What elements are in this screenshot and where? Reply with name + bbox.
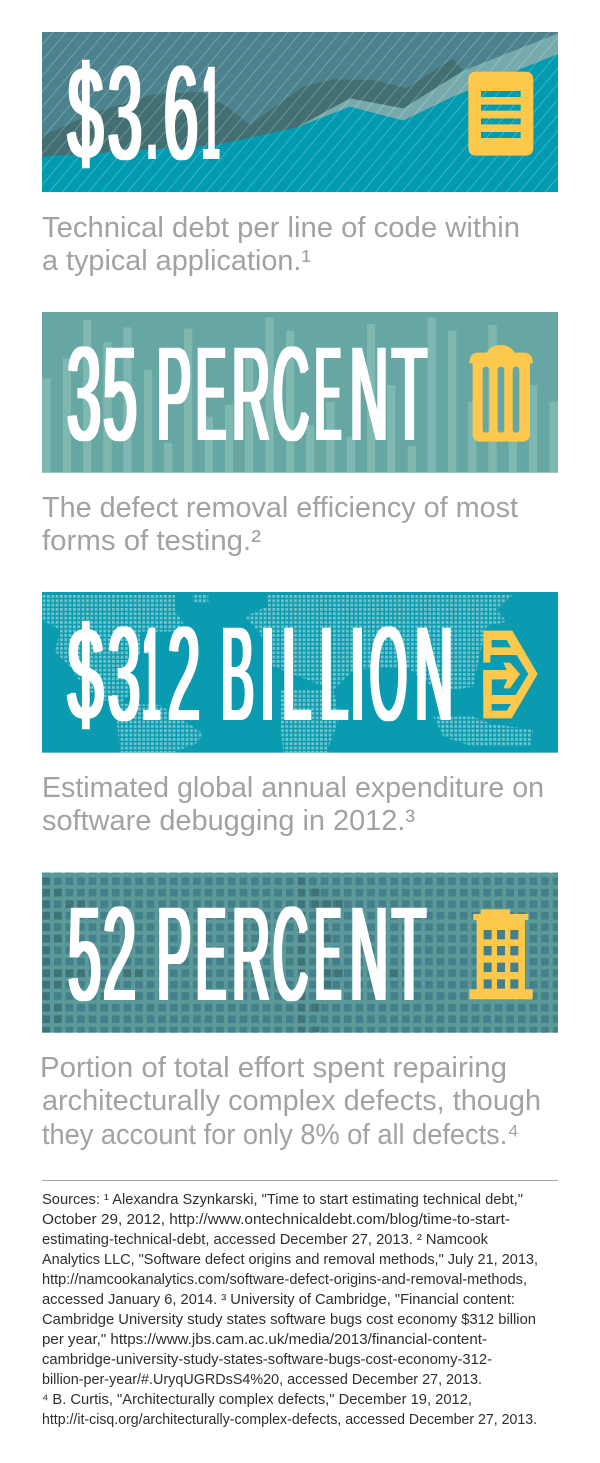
dotted world map background (42, 592, 558, 753)
sources text block: Sources: ¹ Alexandra Szynkarski, "Time to start estimating technical debt," (42, 1192, 523, 1208)
heading: 35 PERCENT: E (315, 320, 341, 469)
sources text block: billion-per-year/#.UryqUGRDsS4%20, accessed December 27, 2013. (42, 1372, 482, 1388)
sources text block (42, 1192, 538, 1428)
panel: $3.61 technical debt (42, 32, 558, 192)
heading: 35 PERCENT: R (232, 320, 270, 469)
panel: $312 billion: N (415, 600, 453, 749)
heading: $312 BILLION: I (350, 600, 365, 749)
sources text block: http://namcookanalytics.com/software-defect-origins-and-removal-methods, (42, 1272, 527, 1288)
panel: $3.61 technical debt: 1 (203, 39, 219, 188)
sources text block: Cambridge University study states software bugs cost economy $312 billion (42, 1312, 536, 1328)
sources text block: estimating-technical-debt, accessed December 27, 2013. ² Namcook (42, 1232, 489, 1248)
heading: 35 PERCENT: N (350, 320, 388, 469)
heading: 52 PERCENT: 5 (68, 880, 101, 1029)
heading: $3.61: . (147, 39, 157, 188)
chart background: area graph with stripes (42, 32, 558, 192)
caption: architectural defects: Portion of total effort spent repairing (40, 1052, 507, 1084)
panel: 52 percent: T (392, 880, 426, 1029)
heading: $3.61: 6 (164, 39, 198, 188)
caption: architectural defects: architecturally complex defects, though (42, 1085, 541, 1117)
caption: global expenditure: software debugging in 2012.³ (42, 805, 415, 837)
heading: 35 PERCENT: P (157, 320, 191, 469)
heading: $312 BILLION: B (221, 600, 254, 749)
caption: defect removal: forms of testing.² (42, 525, 261, 557)
heading: 35 PERCENT: C (273, 320, 309, 469)
heading: 52 PERCENT: E (196, 880, 226, 1029)
heading: 52 PERCENT: C (273, 880, 308, 1029)
heading: $312 BILLION: L (282, 600, 311, 749)
heading: $312 BILLION: I (260, 600, 275, 749)
sources text block: ⁴ B. Curtis, "Architecturally complex defects," December 19, 2012, (42, 1392, 472, 1408)
heading: 52 PERCENT: P (157, 880, 191, 1029)
panel: 35 percent: T (392, 320, 427, 469)
heading: 35 PERCENT: 3 (67, 320, 101, 469)
icon: trash can (469, 345, 533, 442)
panel: $312 billion (42, 592, 558, 753)
sources text block: per year," https://www.jbs.cam.ac.uk/media/2013/financial-content- (42, 1332, 487, 1348)
bar chart background (42, 312, 558, 473)
heading: $312 BILLION: O (370, 600, 407, 749)
caption: architectural defects (40, 1052, 541, 1151)
caption: technical debt: Technical debt per line of code within (42, 212, 520, 244)
sources text block: accessed January 6, 2014. ³ University of Cambridge, "Financial content: (42, 1292, 515, 1308)
panel: 52 percent (42, 873, 558, 1033)
caption: technical debt: a typical application.¹ (42, 245, 311, 277)
caption: defect removal (42, 492, 518, 557)
heading: $312 BILLION: 3 (108, 600, 140, 749)
heading: $3.61: $ (68, 39, 103, 188)
heading: $312 BILLION: L (320, 600, 348, 749)
heading: 52 PERCENT: 2 (103, 880, 136, 1029)
grid background (42, 873, 558, 1033)
sources text block: Analytics LLC, "Software defect origins and removal methods," July 21, 2013, (42, 1252, 538, 1268)
heading: $312 BILLION: $ (68, 600, 103, 749)
caption: global expenditure (42, 772, 544, 837)
caption: defect removal: The defect removal efficiency of most (42, 492, 518, 524)
heading: 35 PERCENT: 5 (103, 320, 137, 469)
heading: 52 PERCENT: E (315, 880, 341, 1029)
panel: 35 percent (42, 312, 558, 473)
caption: technical debt (42, 212, 520, 277)
sources text block: October 29, 2012, http://www.ontechnicaldebt.com/blog/time-to-start- (42, 1212, 510, 1228)
sources text block: http://it-cisq.org/architecturally-complex-defects, accessed December 27, 2013. (42, 1412, 537, 1428)
heading: $312 BILLION: 2 (168, 600, 200, 749)
sources text block: cambridge-university-study-states-software-bugs-cost-economy-312- (42, 1352, 492, 1368)
heading: 52 PERCENT: R (232, 880, 270, 1029)
heading: 35 PERCENT: E (196, 320, 226, 469)
icon: document (468, 72, 533, 156)
icon: office building (469, 909, 533, 999)
heading: $312 BILLION: 1 (143, 600, 160, 749)
icon: arrow shield (482, 631, 538, 718)
heading: $3.61: 3 (108, 39, 142, 188)
heading: 52 PERCENT: N (350, 880, 388, 1029)
caption: global expenditure: Estimated global annual expenditure on (42, 772, 544, 804)
caption: architectural defects: they account for only 8% of all defects.⁴ (42, 1119, 519, 1151)
